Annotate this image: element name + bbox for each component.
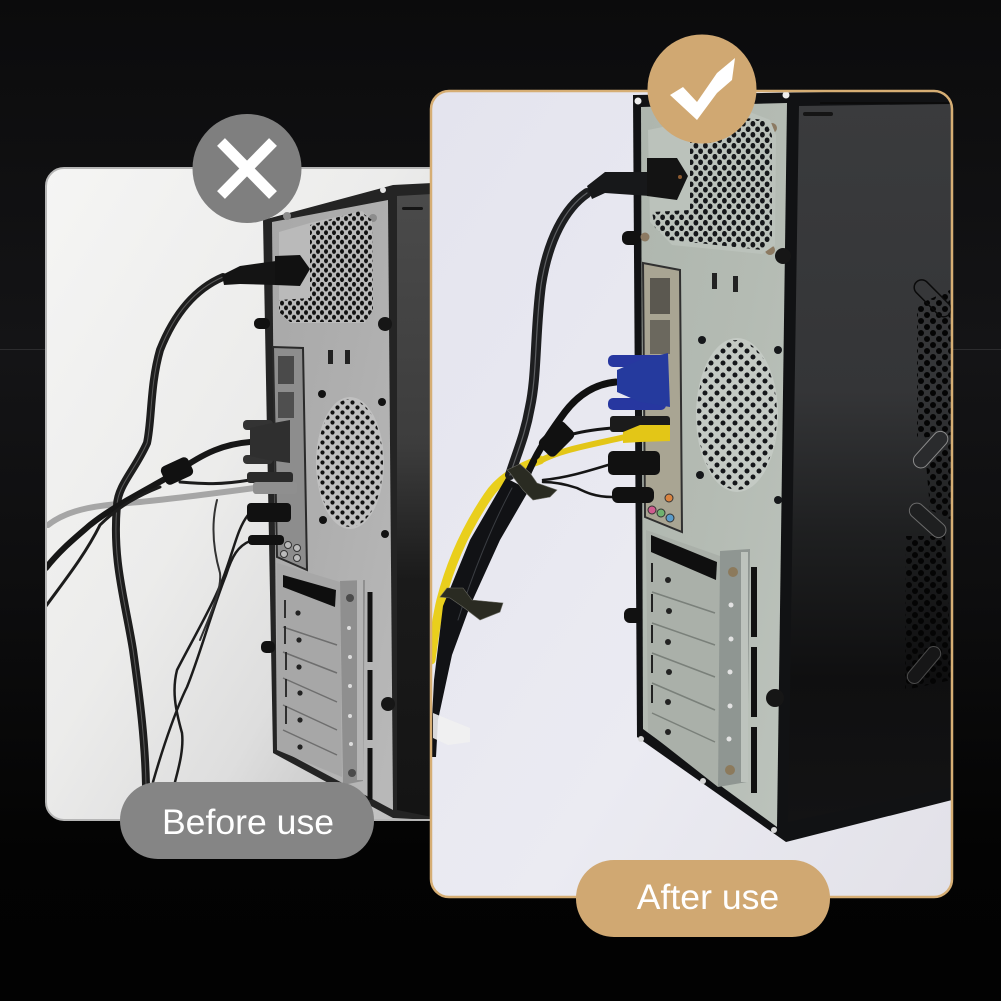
left panel backdrop	[46, 168, 430, 820]
side vent holes	[904, 277, 954, 690]
cable clips	[440, 464, 557, 620]
expansion slots: before use	[277, 563, 370, 800]
computer tower: before use	[254, 183, 432, 820]
left panel border	[46, 168, 430, 820]
panel: before use	[46, 168, 432, 820]
computer tower: after use	[622, 90, 954, 842]
right panel border	[431, 91, 952, 897]
right panel backdrop	[431, 91, 952, 897]
connectors: after use	[537, 158, 688, 503]
cables: organised	[430, 193, 625, 757]
cables: tangled	[46, 277, 255, 785]
connectors: before use	[159, 255, 310, 545]
label: after use	[576, 860, 830, 937]
icon: cross badge	[192, 114, 302, 223]
label: after use: After use	[637, 877, 779, 917]
white connector	[433, 713, 439, 740]
panel: after use	[430, 90, 954, 897]
icon: check badge	[648, 34, 756, 144]
label: before use: Before use	[162, 802, 334, 842]
expansion slots: after use	[646, 530, 754, 793]
label: before use	[120, 782, 374, 859]
